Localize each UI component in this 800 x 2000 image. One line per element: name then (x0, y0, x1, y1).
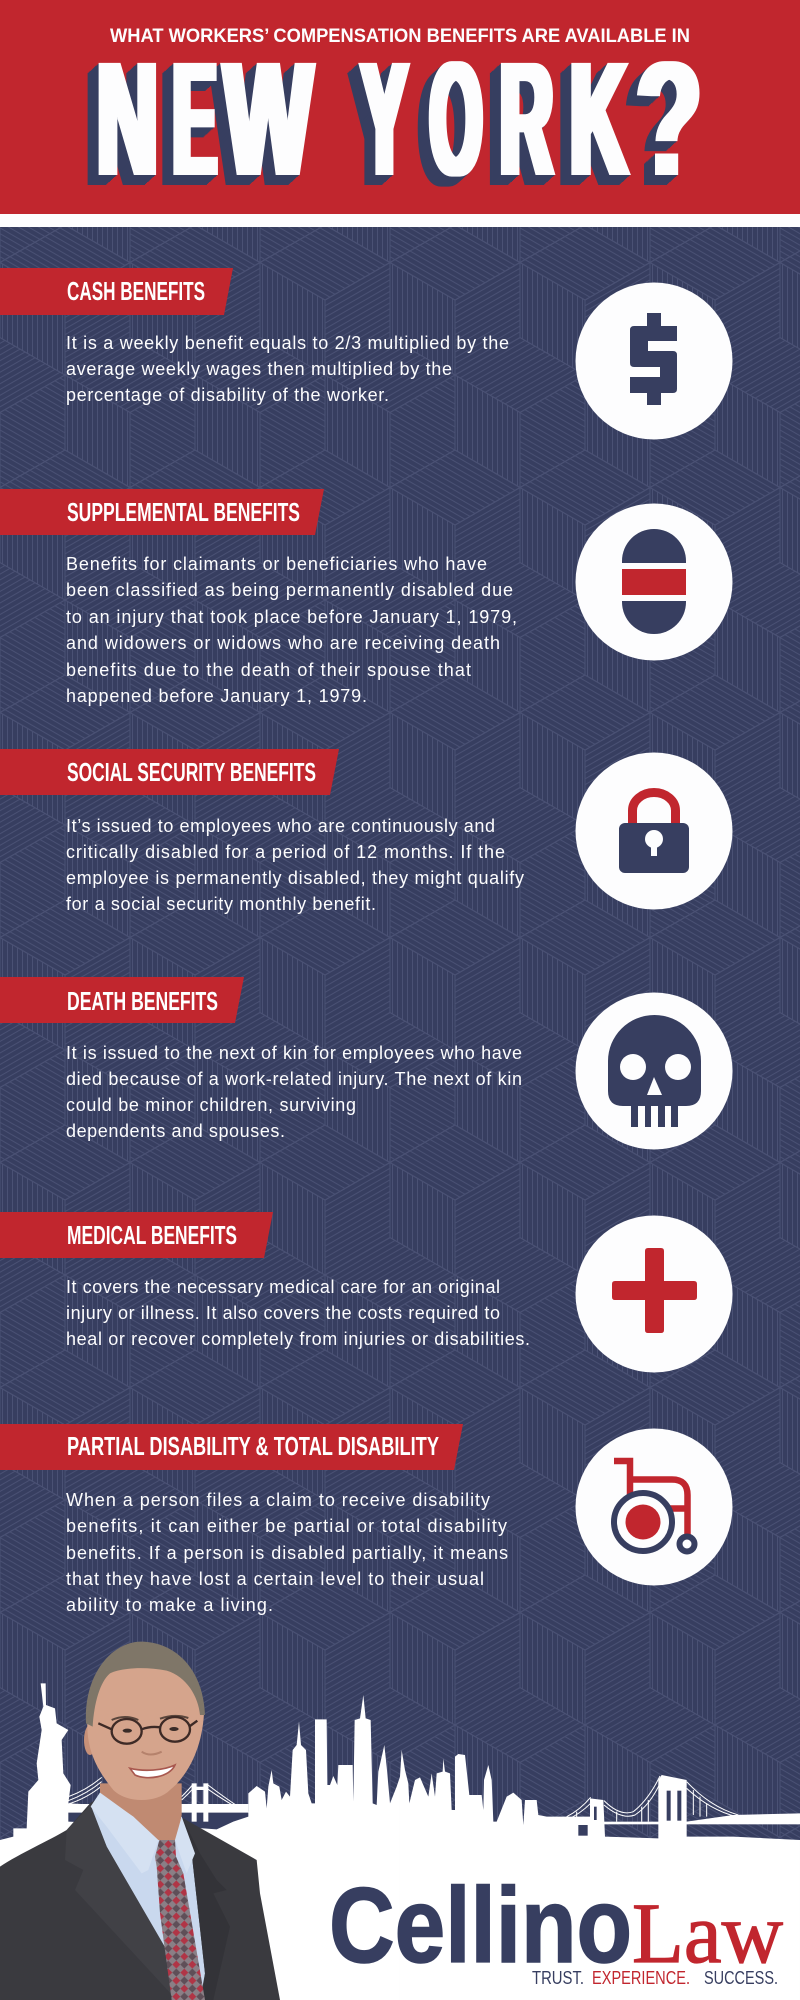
body text: heal or recover completely from injuries or disabilities. (66, 1329, 530, 1349)
body text: percentage of disability of the worker. (66, 385, 389, 405)
skyline: statue of liberty and manhattan (0, 1683, 400, 2000)
panel: medical benefits (0, 1212, 732, 1372)
panel: social security benefits (0, 749, 732, 914)
glasses (98, 1717, 197, 1744)
body text: When a person files a claim to receive disability (66, 1490, 490, 1510)
body text: benefits, it can either be partial or total disability (66, 1516, 507, 1536)
body text: been classified as being permanently disabled due (66, 580, 513, 600)
right lapel (183, 1820, 230, 2000)
heading: SOCIAL SECURITY BENEFITS (67, 757, 316, 787)
icon: skull (576, 992, 732, 1150)
body text: It is a weekly benefit equals to 2/3 multiplied by the (66, 333, 509, 353)
title: NEW YORK?: R (500, 27, 553, 210)
body text (66, 1277, 530, 1349)
body text: died because of a work-related injury. The next of kin (66, 1069, 522, 1089)
suit jacket (0, 1797, 280, 2000)
tagline: TRUST. (532, 1967, 584, 1988)
logo: Cellino Law (329, 1865, 783, 1988)
body text: and widowers or widows who are receiving death (66, 633, 500, 653)
heading: SUPPLEMENTAL BENEFITS (67, 497, 300, 527)
title: NEW YORK? (88, 27, 702, 210)
body text (66, 1043, 522, 1141)
icon: wheelchair (576, 1428, 732, 1586)
body text: employee is permanently disabled, they might qualify (66, 868, 524, 888)
heading ribbon (0, 1424, 463, 1470)
panel: cash benefits (0, 268, 732, 440)
eyebrows and eyes (112, 1716, 188, 1733)
smile (130, 1765, 175, 1778)
panel: supplemental benefits (0, 489, 732, 706)
tagline: SUCCESS. (704, 1967, 778, 1988)
panel: partial and total disability (0, 1424, 732, 1615)
title: NEW YORK?: E (173, 27, 216, 210)
subtitle: WHAT WORKERS’ COMPENSATION BENEFITS ARE AVAILABLE IN (110, 26, 690, 47)
body text: that they have lost a certain level to their usual (66, 1569, 484, 1589)
title: NEW YORK?: ? (636, 27, 702, 210)
heading ribbon (0, 1212, 273, 1258)
body text: It is issued to the next of kin for employees who have (66, 1043, 522, 1063)
heading: DEATH BENEFITS (67, 986, 218, 1016)
body text: injury or illness. It also covers the costs required to (66, 1303, 500, 1323)
face (87, 1660, 204, 1800)
body text: for a social security monthly benefit. (66, 894, 376, 914)
portrait: attorney in suit (0, 1642, 280, 2000)
icon: pill (576, 504, 732, 660)
heading: MEDICAL BENEFITS (67, 1220, 237, 1250)
icon: dollar sign (576, 282, 732, 440)
neck (100, 1783, 182, 1840)
ear (84, 1725, 96, 1755)
body text (66, 333, 509, 405)
hair (86, 1642, 205, 1727)
body text: benefits due to the death of their spouse that (66, 660, 471, 680)
body text: to an injury that took place before January 1, 1979, (66, 607, 517, 627)
wordmark Law: Law (632, 1885, 783, 1981)
body text: dependents and spouses. (66, 1121, 285, 1141)
panel: death benefits (0, 977, 732, 1150)
shirt (91, 1793, 205, 2000)
title: NEW YORK?: N (97, 27, 158, 210)
heading: CASH BENEFITS (67, 276, 205, 306)
body text (66, 816, 524, 914)
icon: medical cross (576, 1216, 732, 1372)
body text (66, 554, 517, 706)
title: NEW YORK?: K (570, 27, 628, 210)
body text: ability to make a living. (66, 1595, 273, 1615)
heading ribbon (0, 268, 233, 315)
skyline: manhattan and brooklyn bridge (400, 1750, 800, 2000)
body text: average weekly wages then multiplied by the (66, 359, 452, 379)
body text: Benefits for claimants or beneficiaries who have (66, 554, 487, 574)
nose shadow (142, 1752, 162, 1754)
body text: It covers the necessary medical care for an original (66, 1277, 500, 1297)
body text: It’s issued to employees who are continuously and (66, 816, 495, 836)
body text (66, 1490, 508, 1615)
heading: PARTIAL DISABILITY & TOTAL DISABILITY (67, 1431, 439, 1461)
tagline: EXPERIENCE. (592, 1967, 690, 1988)
title: NEW YORK?: O (430, 27, 482, 210)
left lapel (65, 1805, 177, 2000)
body text: happened before January 1, 1979. (66, 686, 367, 706)
icon: padlock (576, 752, 732, 910)
heading ribbon (0, 749, 339, 795)
body text: benefits. If a person is disabled partially, it means (66, 1543, 508, 1563)
heading ribbon (0, 489, 324, 535)
tagline (532, 1967, 778, 1988)
title: NEW YORK?: W (224, 27, 312, 210)
heading ribbon (0, 977, 244, 1023)
title: NEW YORK?: Y (361, 27, 408, 210)
necktie (155, 1840, 205, 2000)
header band (0, 0, 800, 214)
collar (91, 1793, 195, 1873)
wordmark Cellino: Cellino (329, 1865, 632, 1985)
body text: could be minor children, surviving (66, 1095, 356, 1115)
body text: critically disabled for a period of 12 months. If the (66, 842, 505, 862)
